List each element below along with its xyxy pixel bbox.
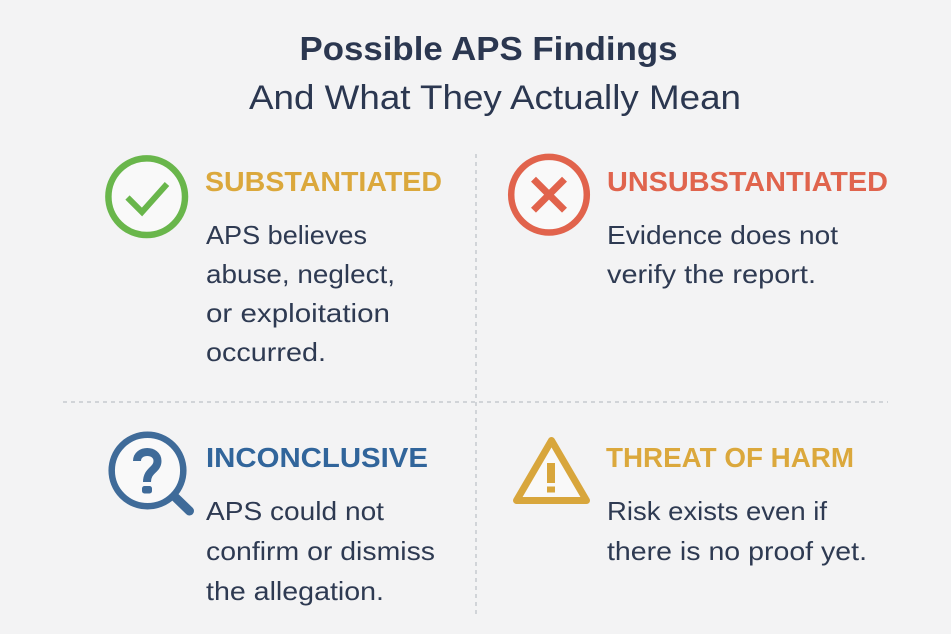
text: unsubstantiated description: verify the report. (607, 259, 816, 289)
heading: threat of harm: THREAT OF HARM (606, 442, 854, 473)
icon: warning triangle (516, 440, 586, 500)
panel: threat of harm (516, 440, 867, 566)
heading: unsubstantiated: UNSUBSTANTIATED (607, 166, 888, 197)
icon: red x circle (511, 157, 587, 232)
text: inconclusive description: APS could not (206, 496, 385, 526)
text: substantiated description: occurred. (206, 337, 326, 367)
panel: unsubstantiated (511, 157, 888, 289)
title: And What They Actually Mean (249, 79, 741, 117)
title (249, 30, 741, 117)
heading: substantiated: SUBSTANTIATED (205, 166, 442, 197)
panel: inconclusive (112, 435, 442, 606)
text: inconclusive description: confirm or dismiss (206, 536, 435, 566)
text: substantiated description: or exploitation (206, 298, 390, 328)
heading: inconclusive: INCONCLUSIVE (206, 442, 428, 473)
icon: green check circle (108, 158, 185, 235)
panel: substantiated (108, 158, 442, 367)
text: unsubstantiated description: Evidence does not (607, 220, 839, 250)
text: substantiated description: APS believes (206, 220, 367, 250)
text: threat of harm description: Risk exists even if (607, 496, 828, 526)
text: substantiated description: abuse, neglect, (206, 259, 395, 289)
text: threat of harm description: there is no proof yet. (607, 536, 867, 566)
icon: magnifying glass with question mark (112, 435, 190, 511)
title: Possible APS Findings (300, 30, 678, 67)
text: inconclusive description: the allegation. (206, 576, 384, 606)
